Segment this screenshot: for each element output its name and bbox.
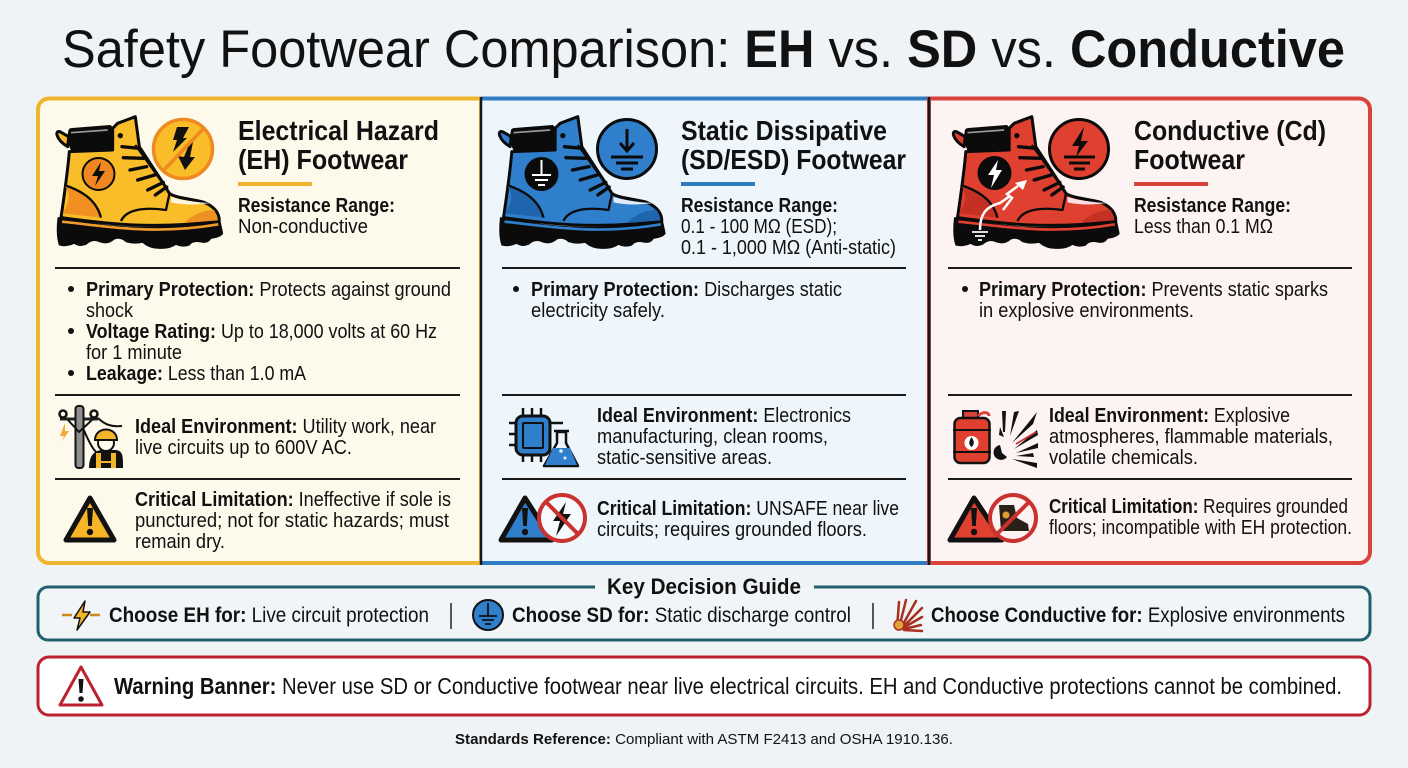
ideal environment text: Ideal Environment: Electronics xyxy=(597,405,851,427)
critical limitation text: floors; incompatible with EH protection. xyxy=(1049,517,1352,539)
icon: no electrical current badge xyxy=(154,120,212,178)
panel: Static Dissipative footwear xyxy=(481,97,929,565)
heading: (SD/ESD) Footwear xyxy=(681,144,906,175)
critical limitation text: Critical Limitation: Requires grounded xyxy=(1049,496,1348,518)
critical limitation text: remain dry. xyxy=(135,531,225,553)
icon: bolt and ground badge xyxy=(1050,120,1108,178)
critical limitation text xyxy=(1049,496,1352,539)
icon: explosion xyxy=(894,600,922,631)
ideal environment text: Ideal Environment: Utility work, near xyxy=(135,416,436,438)
critical limitation text xyxy=(597,498,899,541)
icon: lightning bolt xyxy=(62,601,100,630)
resistance range: 0.1 - 1,000 MΩ (Anti-static) xyxy=(681,237,896,259)
icon: microchip and flask xyxy=(509,408,578,466)
icon: utility pole and worker xyxy=(60,406,123,468)
heading xyxy=(238,115,439,186)
ideal environment text: volatile chemicals. xyxy=(1049,447,1198,469)
ideal environment text: live circuits up to 600V AC. xyxy=(135,437,352,459)
protection bullets: Leakage: Less than 1.0 mA xyxy=(86,363,307,385)
protection bullets: Voltage Rating: Up to 18,000 volts at 60 Hz xyxy=(86,321,437,343)
guide heading: Key Decision Guide xyxy=(607,574,801,599)
protection bullet: Primary Protection: Discharges static xyxy=(531,279,842,301)
title: Safety Footwear Comparison: EH vs. SD vs. Conductive xyxy=(62,20,1345,79)
resistance range xyxy=(681,195,896,259)
icon: warning triangle outline xyxy=(60,667,102,705)
boot: blue SD boot xyxy=(499,117,665,248)
heading: Electrical Hazard xyxy=(238,115,439,146)
critical limitation text xyxy=(135,489,451,553)
guide item: Conductive: Choose Conductive for: Explosive environments xyxy=(931,604,1345,627)
icon: warning triangle xyxy=(66,498,114,540)
protection bullets: Primary Protection: Protects against ground xyxy=(86,279,451,301)
icon: ground arrow badge xyxy=(598,120,656,178)
resistance range: 0.1 - 100 MΩ (ESD); xyxy=(681,216,837,238)
protection bullets: shock xyxy=(86,300,134,322)
standards reference: Standards Reference: Compliant with ASTM F2413 and OSHA 1910.136. xyxy=(455,731,953,748)
resistance range: Less than 0.1 MΩ xyxy=(1134,216,1273,238)
protection bullet xyxy=(962,279,1328,322)
heading: Footwear xyxy=(1134,144,1245,175)
resistance range: Non-conductive xyxy=(238,216,368,238)
critical limitation text: Critical Limitation: UNSAFE near live xyxy=(597,498,899,520)
protection bullet: Primary Protection: Prevents static sparks xyxy=(979,279,1328,301)
resistance range: Resistance Range: xyxy=(1134,195,1291,217)
protection bullets xyxy=(68,279,451,385)
panel: key decision guide xyxy=(38,574,1370,640)
heading: (EH) Footwear xyxy=(238,144,408,175)
ideal environment text: static-sensitive areas. xyxy=(597,447,772,469)
protection bullet: in explosive environments. xyxy=(979,300,1194,322)
resistance range xyxy=(238,195,395,238)
critical limitation text: circuits; requires grounded floors. xyxy=(597,519,867,541)
critical limitation text: punctured; not for static hazards; must xyxy=(135,510,449,532)
protection bullet xyxy=(513,279,842,322)
warning banner xyxy=(38,657,1370,715)
panel: Electrical Hazard footwear xyxy=(38,98,481,563)
heading xyxy=(681,115,906,186)
protection bullet: electricity safely. xyxy=(531,300,665,322)
boot: yellow EH boot xyxy=(57,117,223,248)
resistance range: Resistance Range: xyxy=(681,195,838,217)
icon: ground symbol xyxy=(473,600,503,630)
protection bullets: for 1 minute xyxy=(86,342,182,364)
icon: warning triangle and no-electricity sign xyxy=(501,495,585,541)
heading: Conductive (Cd) xyxy=(1134,115,1326,146)
guide item: SD: Choose SD for: Static discharge control xyxy=(512,604,851,627)
ideal environment text xyxy=(135,416,436,459)
ideal environment text xyxy=(597,405,851,469)
ideal environment text: atmospheres, flammable materials, xyxy=(1049,426,1333,448)
ideal environment text xyxy=(1049,405,1333,469)
heading: Static Dissipative xyxy=(681,115,887,146)
ideal environment text: manufacturing, clean rooms, xyxy=(597,426,828,448)
ideal environment text: Ideal Environment: Explosive xyxy=(1049,405,1290,427)
resistance range xyxy=(1134,195,1291,238)
guide item: EH: Choose EH for: Live circuit protection xyxy=(109,604,429,627)
boot: red conductive boot xyxy=(953,117,1119,248)
resistance range: Resistance Range: xyxy=(238,195,395,217)
critical limitation text: Critical Limitation: Ineffective if sole is xyxy=(135,489,451,511)
panel: Conductive footwear xyxy=(929,97,1370,565)
heading xyxy=(1134,115,1326,186)
icon: warning triangle and no-EH-boot sign xyxy=(950,495,1036,541)
icon: fuel canister and explosion xyxy=(953,411,1038,468)
